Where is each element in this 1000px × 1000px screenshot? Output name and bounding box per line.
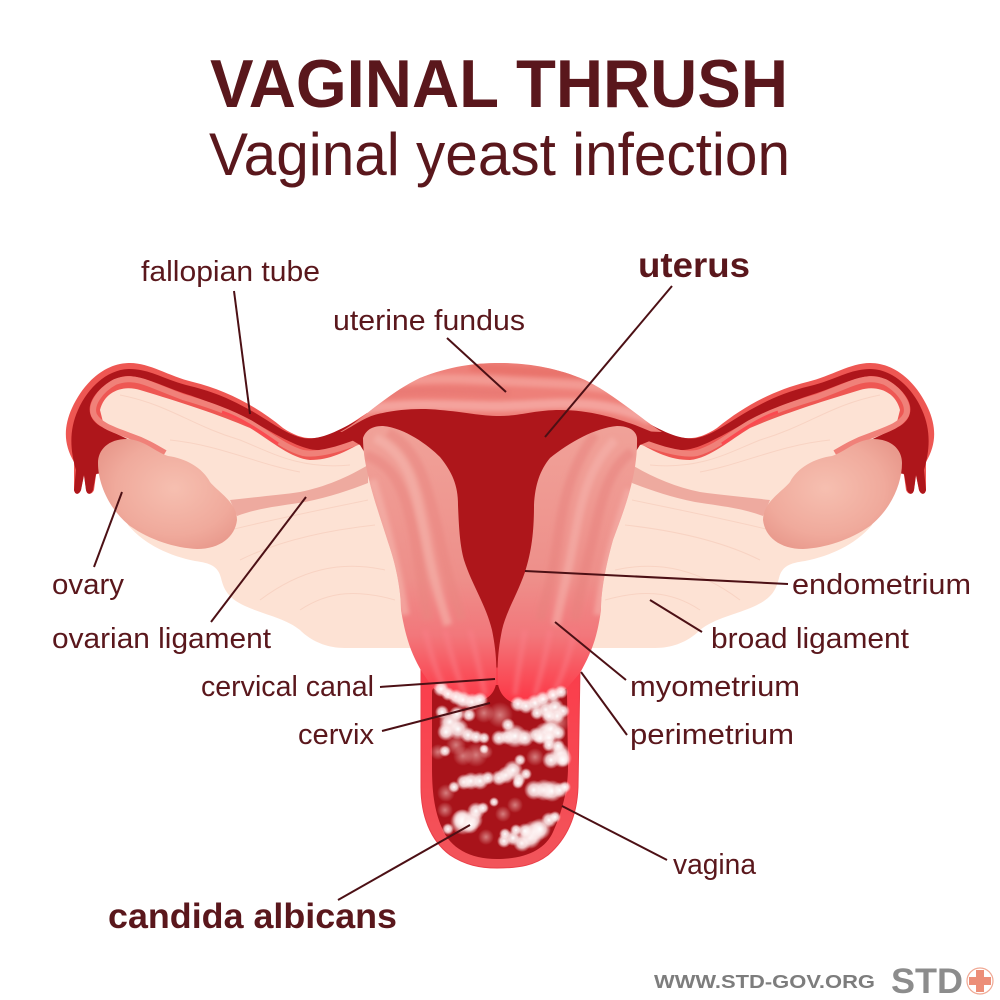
icon: red cross logo xyxy=(967,968,993,994)
leader: ovary xyxy=(94,492,122,567)
wall gradient xyxy=(363,426,496,700)
leader: endometrium xyxy=(525,571,788,584)
label: cervical canal: cervical canal xyxy=(201,671,374,703)
label: endometrium: endometrium xyxy=(792,569,971,601)
ovary xyxy=(98,439,237,549)
uterus anatomy illustration xyxy=(66,360,934,868)
right adnexa: mirrored tube, ligament and ovary xyxy=(580,363,934,648)
footer url: WWW.STD-GOV.ORG xyxy=(654,972,875,992)
vagina lumen xyxy=(432,685,568,859)
label: candida albicans: candida albicans xyxy=(108,897,397,936)
uterine fundus xyxy=(340,360,662,435)
ligament folds xyxy=(120,395,395,610)
label: uterus: uterus xyxy=(638,246,750,285)
label: cervix: cervix xyxy=(298,719,374,751)
title: VAGINAL THRUSH xyxy=(210,46,788,122)
footer logo text: STD xyxy=(891,962,963,1000)
right uterine wall xyxy=(498,426,638,704)
leader: ovarian ligament xyxy=(211,497,306,622)
label: vagina: vagina xyxy=(673,849,757,881)
fallopian tube lumen and fimbriae xyxy=(71,369,420,494)
leader: cervical canal xyxy=(380,679,495,687)
broad ligament xyxy=(85,376,420,648)
fundus base xyxy=(340,360,662,435)
label: broad ligament: broad ligament xyxy=(711,623,909,655)
leader: fallopian tube xyxy=(234,291,250,414)
label: uterine fundus: uterine fundus xyxy=(333,305,525,337)
bright tube lining xyxy=(222,412,278,444)
leader: cervix xyxy=(382,703,490,731)
leader: uterine fundus xyxy=(447,338,506,392)
wall gradient xyxy=(498,426,638,704)
vagina wall xyxy=(421,668,580,868)
label: perimetrium: perimetrium xyxy=(630,719,794,751)
tube lining xyxy=(93,379,363,454)
label: ovarian ligament: ovarian ligament xyxy=(52,623,271,655)
leader: vagina xyxy=(562,806,667,860)
leader: myometrium xyxy=(555,622,626,680)
leader: perimetrium xyxy=(581,672,627,735)
leader: uterus xyxy=(545,286,672,437)
label: ovary: ovary xyxy=(52,569,124,601)
left uterine wall xyxy=(363,426,496,700)
uterine cavity xyxy=(340,409,662,705)
dense patches xyxy=(433,681,572,852)
candida albicans white patches xyxy=(430,681,572,852)
left adnexa: broad ligament, tube and ovary xyxy=(66,363,420,648)
wall stripes xyxy=(515,434,632,695)
leader: candida albicans xyxy=(338,825,470,900)
wall stripes xyxy=(365,432,485,695)
faded patches xyxy=(430,702,570,845)
label: fallopian tube: fallopian tube xyxy=(141,256,320,288)
subtitle: Vaginal yeast infection xyxy=(209,121,790,188)
leader lines xyxy=(94,286,788,900)
label: myometrium: myometrium xyxy=(630,671,800,703)
fallopian tube outer wall xyxy=(66,363,400,494)
fundus bands xyxy=(360,366,650,420)
leader: broad ligament xyxy=(650,600,702,632)
ovarian ligament xyxy=(230,465,368,516)
